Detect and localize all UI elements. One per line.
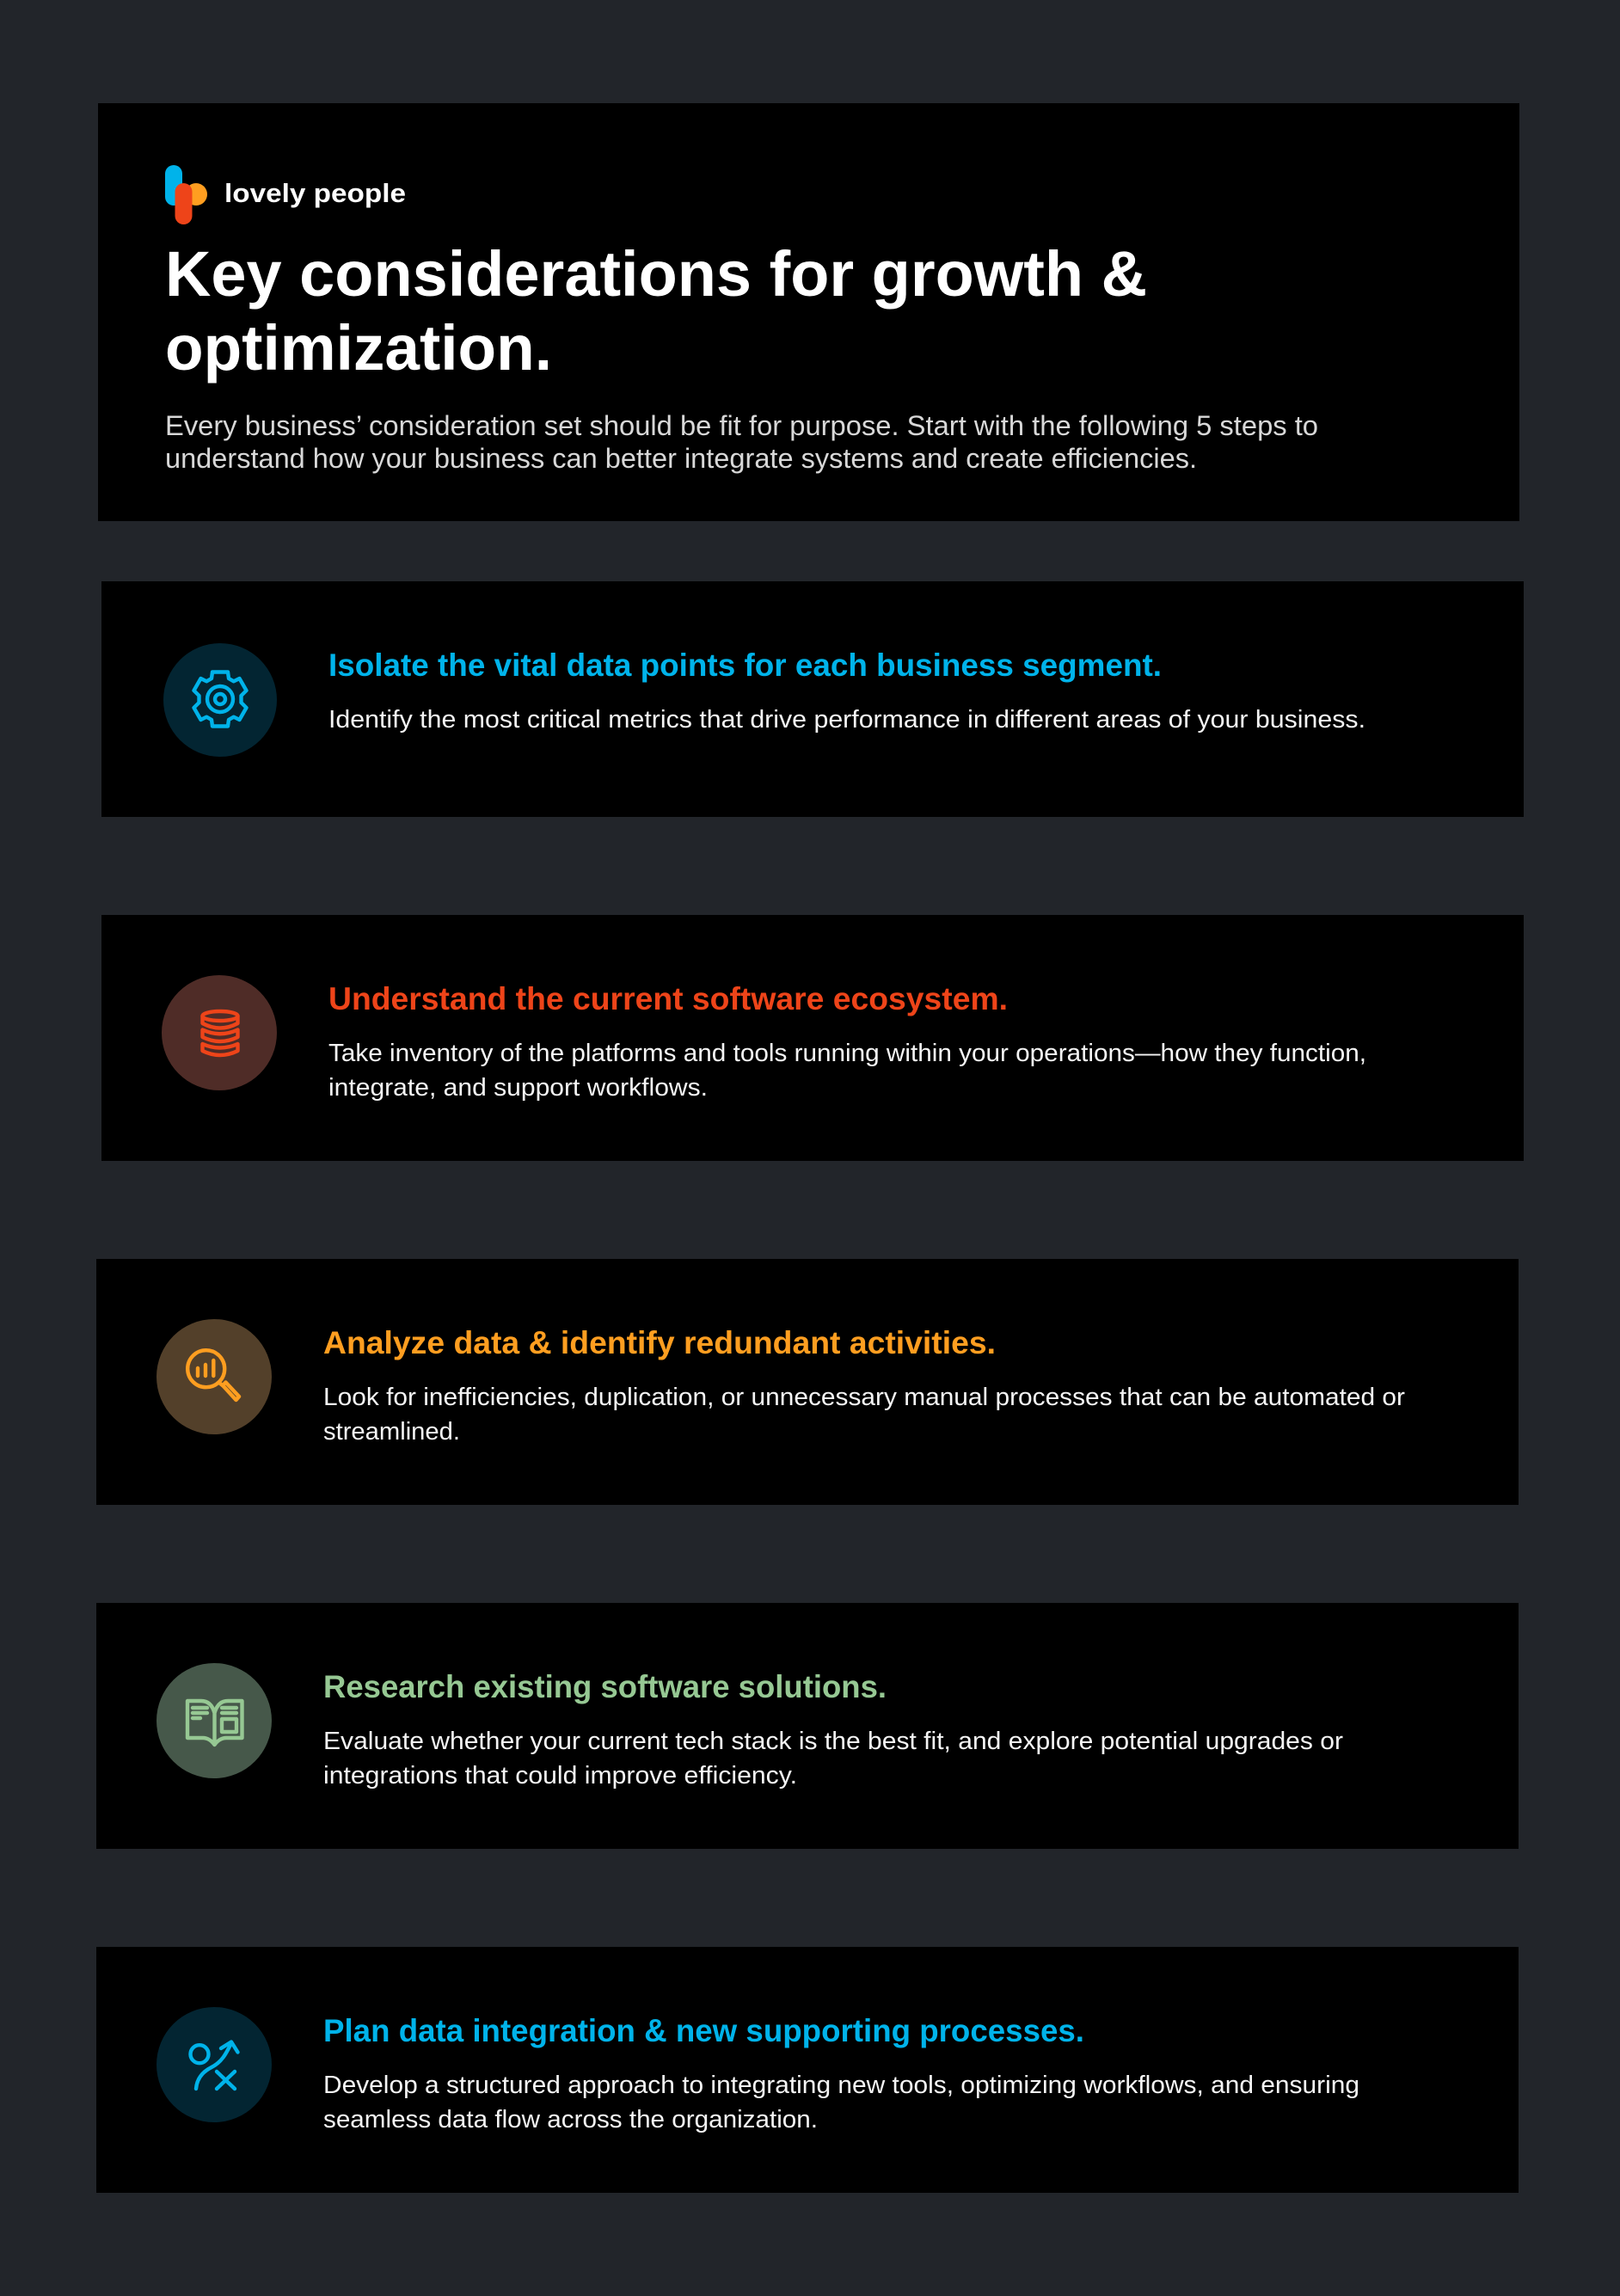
step 2 description: Take inventory of the platforms and tools running within your operations—how they function,	[328, 1040, 1366, 1067]
step 5 heading: Plan data integration & new supporting processes.	[323, 2013, 1084, 2048]
step 4 heading: Research existing software solutions.	[323, 1669, 887, 1704]
intro text: Every business’ consideration set should be fit for purpose. Start with the following 5 steps to	[165, 410, 1318, 441]
step 3 heading: Analyze data & identify redundant activities.	[323, 1325, 996, 1360]
icon: magnifier with bar chart	[156, 1319, 272, 1434]
logo	[165, 165, 406, 224]
icon: database	[162, 975, 277, 1090]
intro text	[165, 410, 1318, 474]
step 1 heading: Isolate the vital data points for each business segment.	[328, 648, 1162, 683]
icon: open book	[156, 1663, 272, 1778]
step 3 description: streamlined.	[323, 1418, 460, 1446]
step 5 description: seamless data flow across the organization.	[323, 2106, 818, 2133]
title	[165, 238, 1147, 384]
panel: step 3 analyze data	[96, 1259, 1519, 1505]
title: Key considerations for growth &	[165, 238, 1147, 310]
step 1 description: Identify the most critical metrics that drive performance in different areas of your business.	[328, 706, 1365, 734]
panel: step 2 software ecosystem	[101, 915, 1524, 1161]
icon: lovely people logo mark	[165, 165, 207, 224]
step 4 description: integrations that could improve efficiency.	[323, 1762, 797, 1790]
icon: strategy play with circle, cross and arrow	[156, 2007, 272, 2122]
panel: header	[98, 103, 1519, 521]
step 3 description: Look for inefficiencies, duplication, or unnecessary manual processes that can be automated or	[323, 1384, 1405, 1411]
step 2 description	[328, 1040, 1366, 1102]
panel: step 1 isolate data points	[101, 581, 1524, 817]
step 3 description	[323, 1384, 1405, 1446]
panel: step 4 research software	[96, 1603, 1519, 1849]
icon: gear	[163, 643, 277, 757]
step 4 description	[323, 1728, 1343, 1790]
step 2 heading: Understand the current software ecosystem.	[328, 981, 1008, 1016]
logo wordmark: lovely people	[224, 178, 406, 208]
step 5 description	[323, 2072, 1359, 2133]
intro text: understand how your business can better integrate systems and create efficiencies.	[165, 443, 1197, 474]
step 4 description: Evaluate whether your current tech stack is the best fit, and explore potential upgrades or	[323, 1728, 1343, 1755]
panel: step 5 plan data integration	[96, 1947, 1519, 2193]
step 2 description: integrate, and support workflows.	[328, 1074, 708, 1102]
title: optimization.	[165, 312, 552, 384]
step 5 description: Develop a structured approach to integrating new tools, optimizing workflows, and ensuring	[323, 2072, 1359, 2099]
